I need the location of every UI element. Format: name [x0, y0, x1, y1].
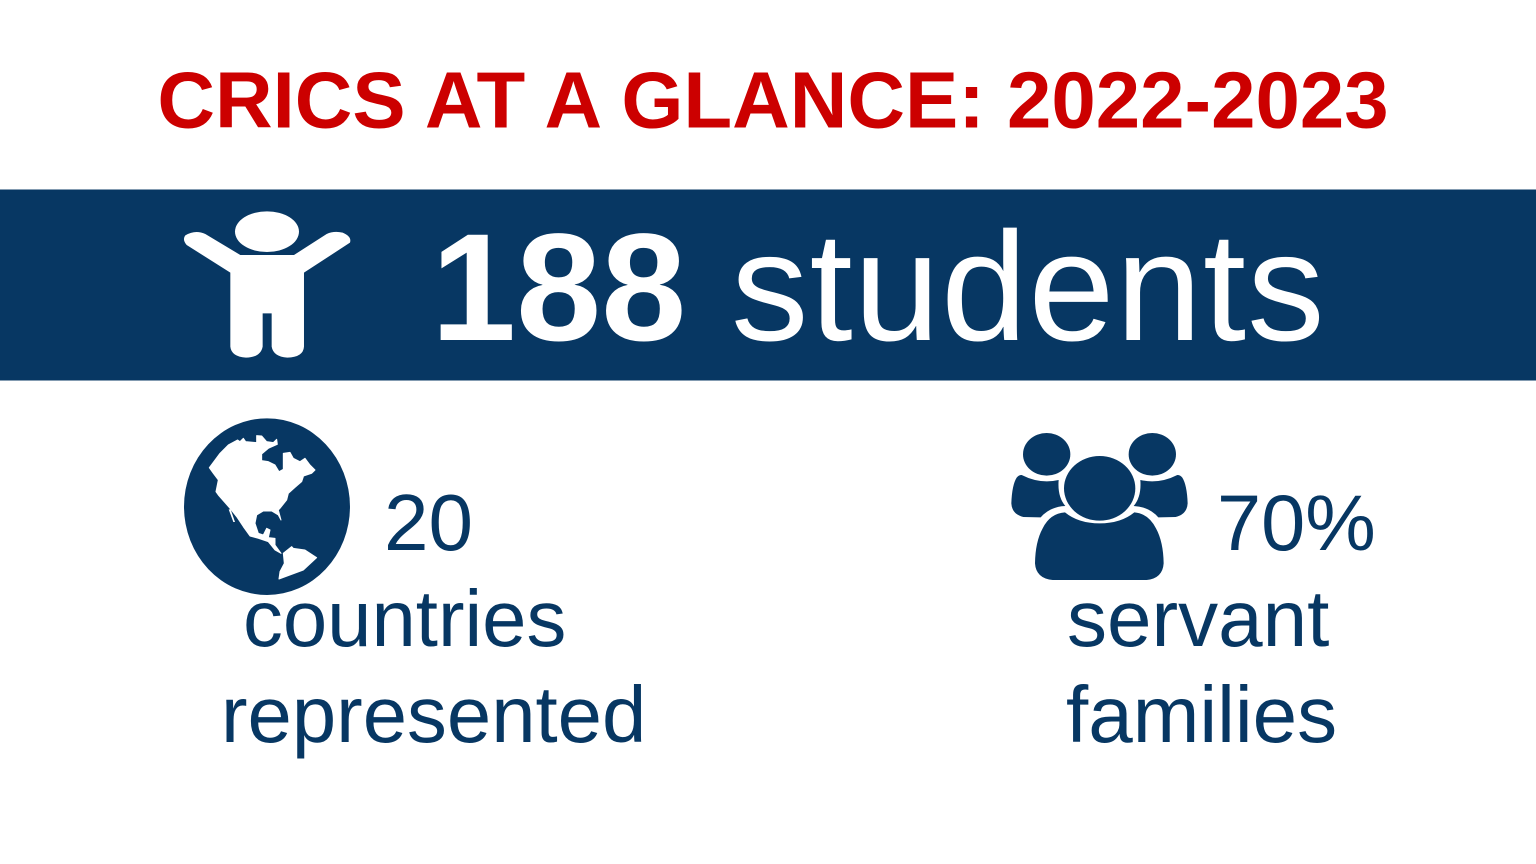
stat: 70% servant families	[1066, 478, 1376, 759]
panel: countries represented	[184, 418, 646, 759]
stat: 20 countries represented: represented	[221, 670, 646, 759]
stat: 20 countries represented	[221, 478, 646, 759]
students figure: students	[731, 200, 1326, 373]
students figure	[431, 200, 1326, 373]
panel: servant families	[1011, 433, 1376, 759]
stat: 20 countries represented: 20	[384, 478, 473, 567]
panel: students banner	[0, 190, 1536, 380]
stat: 20 countries represented: countries	[243, 574, 566, 663]
stat: 70% servant families: servant	[1067, 574, 1329, 663]
stat: 70% servant families: families	[1066, 670, 1337, 759]
icon: globe	[184, 418, 350, 595]
students figure: 188	[431, 202, 686, 373]
stat: 70% servant families: 70%	[1217, 478, 1376, 567]
icon: person with raised arms	[184, 211, 350, 358]
icon: group of people	[1011, 433, 1188, 580]
title: CRICS AT A GLANCE: 2022-2023	[157, 56, 1389, 144]
